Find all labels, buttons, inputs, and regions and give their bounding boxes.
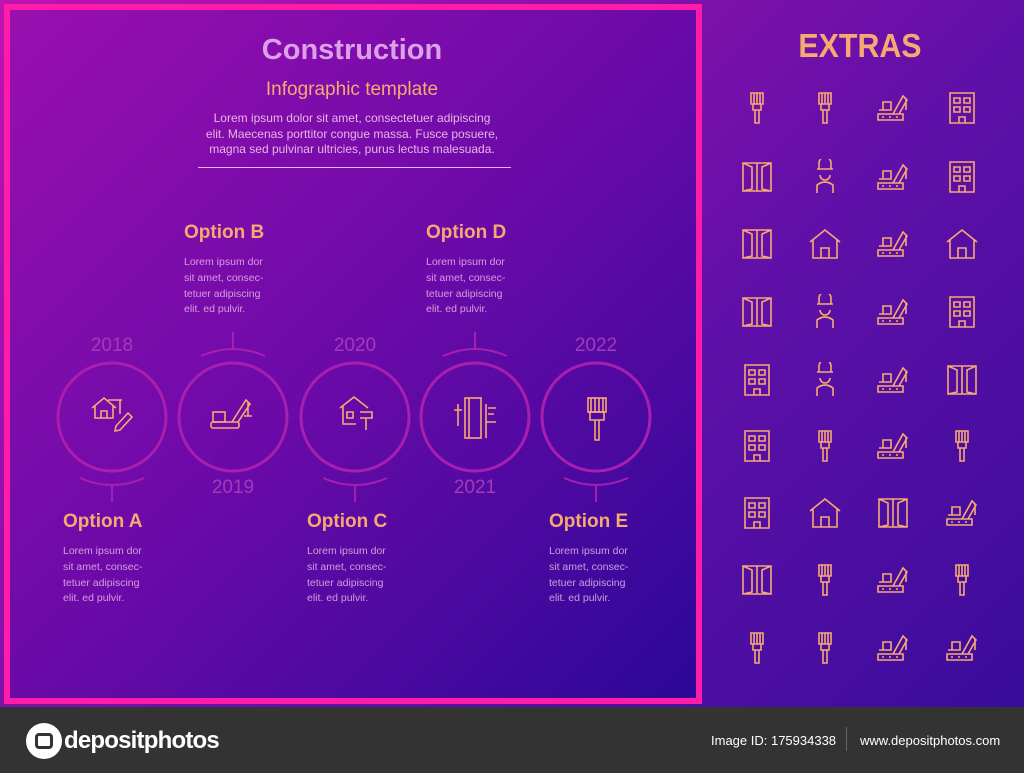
option A: tetuer adipiscing — [63, 577, 139, 589]
option D: Option D — [426, 222, 506, 243]
option E: Option E — [549, 511, 628, 532]
logo — [26, 723, 219, 759]
intro text: magna sed pulvinar ultricies, purus lectus malesuada. — [209, 142, 495, 156]
image id: Image ID: 175934338 — [711, 733, 836, 748]
text: 2022 — [575, 335, 617, 356]
row icons — [743, 93, 977, 663]
circle E — [542, 363, 650, 502]
option E: elit. ed pulvir. — [549, 592, 610, 604]
option C — [307, 511, 387, 604]
option A: Lorem ipsum dor — [63, 545, 142, 557]
timeline — [56, 332, 652, 502]
text: 2021 — [454, 477, 496, 498]
option B — [184, 222, 264, 315]
icon: house paint — [340, 397, 372, 430]
option B: Option B — [184, 222, 264, 243]
circle A — [58, 363, 166, 502]
icon: door tools — [454, 398, 496, 438]
icon: crane — [211, 400, 252, 428]
extras icon grid — [742, 92, 978, 664]
option D: tetuer adipiscing — [426, 288, 502, 300]
option A: sit amet, consec- — [63, 561, 142, 573]
option E: sit amet, consec- — [549, 561, 628, 573]
circle C — [301, 363, 409, 502]
footer bar: www.depositphotos.com — [860, 733, 1000, 748]
extras heading: EXTRAS — [798, 27, 922, 64]
option B: Lorem ipsum dor — [184, 256, 263, 268]
text: 2019 — [212, 477, 254, 498]
logo: depositphotos — [64, 727, 219, 754]
years: 2018 — [91, 335, 133, 356]
option A: elit. ed pulvir. — [63, 592, 124, 604]
icon: brush — [588, 398, 606, 440]
option D: sit amet, consec- — [426, 272, 505, 284]
option B: tetuer adipiscing — [184, 288, 260, 300]
option C: tetuer adipiscing — [307, 577, 383, 589]
intro text — [206, 111, 498, 156]
option E: tetuer adipiscing — [549, 577, 625, 589]
option B: elit. ed pulvir. — [184, 303, 245, 315]
option D: elit. ed pulvir. — [426, 303, 487, 315]
option A: Option A — [63, 511, 142, 532]
subtitle: Infographic template — [266, 79, 438, 100]
text: 2020 — [334, 335, 376, 356]
footer bar — [0, 707, 1024, 773]
main panel — [4, 4, 702, 704]
intro text: elit. Maecenas porttitor congue massa. Fusce posuere, — [206, 126, 498, 140]
circle B — [179, 332, 287, 471]
option E: Lorem ipsum dor — [549, 545, 628, 557]
intro text: Lorem ipsum dolor sit amet, consectetuer adipiscing — [214, 111, 490, 125]
option C: Lorem ipsum dor — [307, 545, 386, 557]
option B: sit amet, consec- — [184, 272, 263, 284]
option C: elit. ed pulvir. — [307, 592, 368, 604]
option D: Lorem ipsum dor — [426, 256, 505, 268]
option A — [63, 511, 142, 604]
option C: sit amet, consec- — [307, 561, 386, 573]
icon: house plan — [92, 398, 132, 431]
option C: Option C — [307, 511, 387, 532]
option E — [549, 511, 628, 604]
title: Construction — [262, 34, 442, 66]
option D — [426, 222, 506, 315]
circle D — [421, 332, 529, 471]
